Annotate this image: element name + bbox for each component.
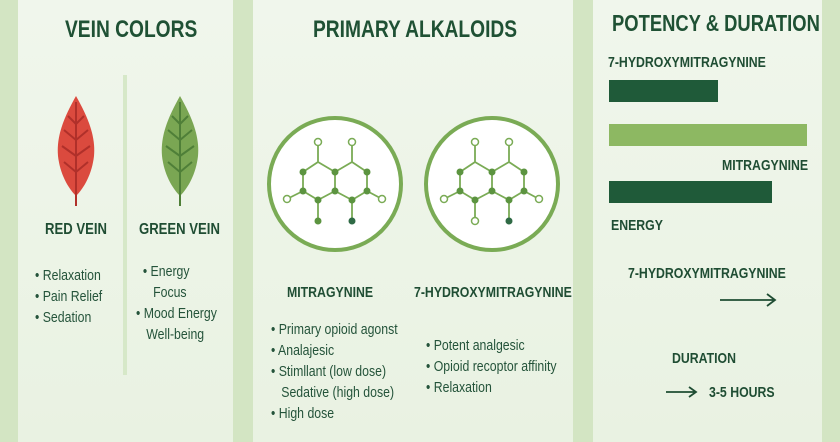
label: bar 1: 7-HYDROXYMITRAGYNINE	[608, 54, 766, 71]
list: mitragynine: Sedative (high dose)	[281, 384, 394, 401]
bar: energy	[609, 181, 772, 203]
list: green vein: • Energy	[143, 263, 190, 280]
label: mitragynine: MITRAGYNINE	[287, 284, 373, 301]
icon: mitragynine molecule	[267, 116, 403, 252]
list: red vein: • Relaxation	[35, 267, 101, 284]
bar: mitragynine	[609, 124, 807, 146]
label: duration: DURATION	[672, 350, 736, 367]
list: 7-hydroxymitragynine: • Relaxation	[426, 379, 492, 396]
arrow: duration	[666, 386, 698, 398]
list: green vein: • Mood Energy	[136, 305, 217, 322]
panel: primary alkaloids	[253, 0, 573, 442]
list: mitragynine	[271, 321, 398, 422]
title: VEIN COLORS	[65, 16, 197, 43]
bar: 7-hydroxymitragynine	[609, 80, 718, 102]
icon: red leaf	[58, 96, 94, 206]
list: 7-hydroxymitragynine: • Potent analgesic	[426, 337, 525, 354]
label: 7-hydroxymitragynine: 7-HYDROXYMITRAGYNINE	[414, 284, 572, 301]
list: green vein	[136, 263, 217, 343]
list: red vein: • Sedation	[35, 309, 91, 326]
panel: potency & duration	[593, 0, 822, 442]
list: green vein: Focus	[153, 284, 187, 301]
label: 3-5 hours: 3-5 HOURS	[709, 384, 775, 401]
arrow	[720, 293, 776, 307]
label: 7-hydroxymitragynine duration: 7-HYDROXYMITRAGYNINE	[628, 265, 786, 282]
icon: green leaf	[162, 96, 198, 206]
list: mitragynine: • Stimllant (low dose)	[271, 363, 386, 380]
list: 7-hydroxymitragynine: • Opioid recoptor affinity	[426, 358, 557, 375]
list: red vein	[35, 267, 102, 326]
divider	[123, 75, 127, 375]
label: mitragynine bar: MITRAGYNINE	[722, 157, 808, 174]
list: mitragynine: • Primary opioid agonst	[271, 321, 398, 338]
panel: vein colors	[18, 0, 233, 442]
list: green vein: Well-being	[146, 326, 204, 343]
list: mitragynine: • High dose	[271, 405, 334, 422]
label: energy: ENERGY	[611, 217, 663, 234]
heading: green vein: GREEN VEIN	[139, 221, 220, 238]
icon: 7-hydroxymitragynine molecule	[424, 116, 560, 252]
list: mitragynine: • Analajesic	[271, 342, 334, 359]
heading: red vein: RED VEIN	[45, 221, 107, 238]
title: PRIMARY ALKALOIDS	[313, 16, 517, 43]
title: POTENCY & DURATION	[612, 10, 820, 36]
list: 7-hydroxymitragynine	[426, 337, 557, 396]
list: red vein: • Pain Relief	[35, 288, 102, 305]
